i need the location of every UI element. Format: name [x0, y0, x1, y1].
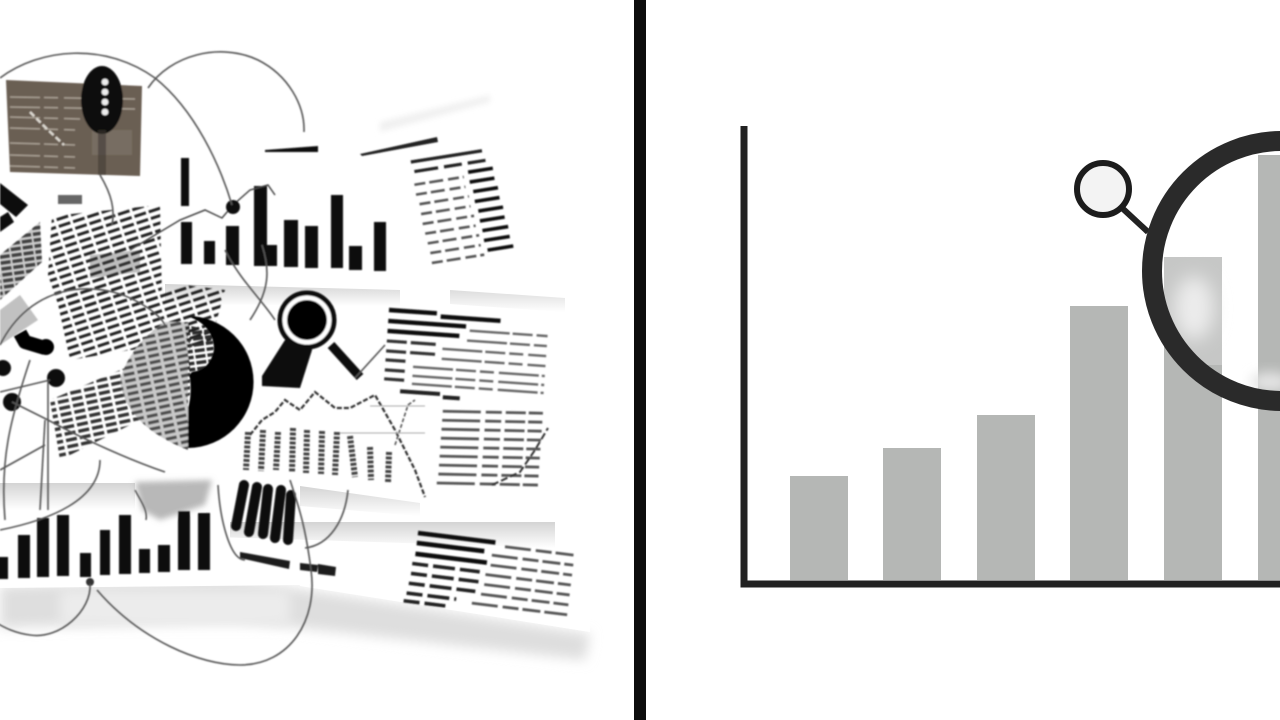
- network nodes: [0, 200, 240, 586]
- chart: black half disk: [187, 316, 254, 448]
- icon: large magnifier lens: [1152, 141, 1280, 401]
- table: top right: [411, 148, 514, 264]
- divider: [634, 0, 646, 720]
- heading strokes: top table: [265, 137, 438, 156]
- bar: 3: [977, 415, 1035, 580]
- table: lower right: [394, 391, 544, 490]
- bar: 2: [883, 448, 941, 580]
- line chart: lower center: [246, 392, 425, 497]
- bar: 1: [790, 476, 848, 580]
- bar: 5: [1164, 257, 1222, 580]
- bar chart: bottom: [0, 511, 210, 579]
- paper edge highlight: [300, 566, 590, 632]
- line over top chart: [130, 185, 275, 250]
- brown data sheet: [6, 80, 142, 176]
- icon: black oval with dots: [81, 66, 123, 175]
- icon: small magnifier: [1077, 163, 1148, 232]
- connecting curves: [0, 52, 385, 665]
- smudge: gray map patch: [135, 480, 212, 520]
- chart: half disk hatched part: [120, 322, 215, 450]
- black diagonal stripes: [0, 183, 42, 345]
- paper: bottom sheet: [0, 530, 590, 632]
- paper shadows: [0, 95, 590, 660]
- bar: 6: [1258, 155, 1280, 580]
- panel: clear insight chart: [744, 126, 1280, 584]
- bar: 4: [1070, 306, 1128, 580]
- chart axes: [744, 126, 1280, 584]
- table block: center-left data text: [50, 285, 225, 460]
- heavy marks beside bottom chart: [240, 552, 336, 576]
- trend line on lower right table: [492, 428, 548, 485]
- table: middle right: [384, 310, 549, 393]
- bar chart: top: [181, 158, 386, 271]
- icon: magnifying glass with black block: [262, 293, 360, 388]
- table block: small data text: [48, 195, 162, 310]
- icon: slanted black ovals: [236, 485, 291, 540]
- highlight inside lens: [1164, 257, 1280, 392]
- panel: messy data collage: [0, 52, 590, 665]
- table: bottom right: [404, 532, 575, 621]
